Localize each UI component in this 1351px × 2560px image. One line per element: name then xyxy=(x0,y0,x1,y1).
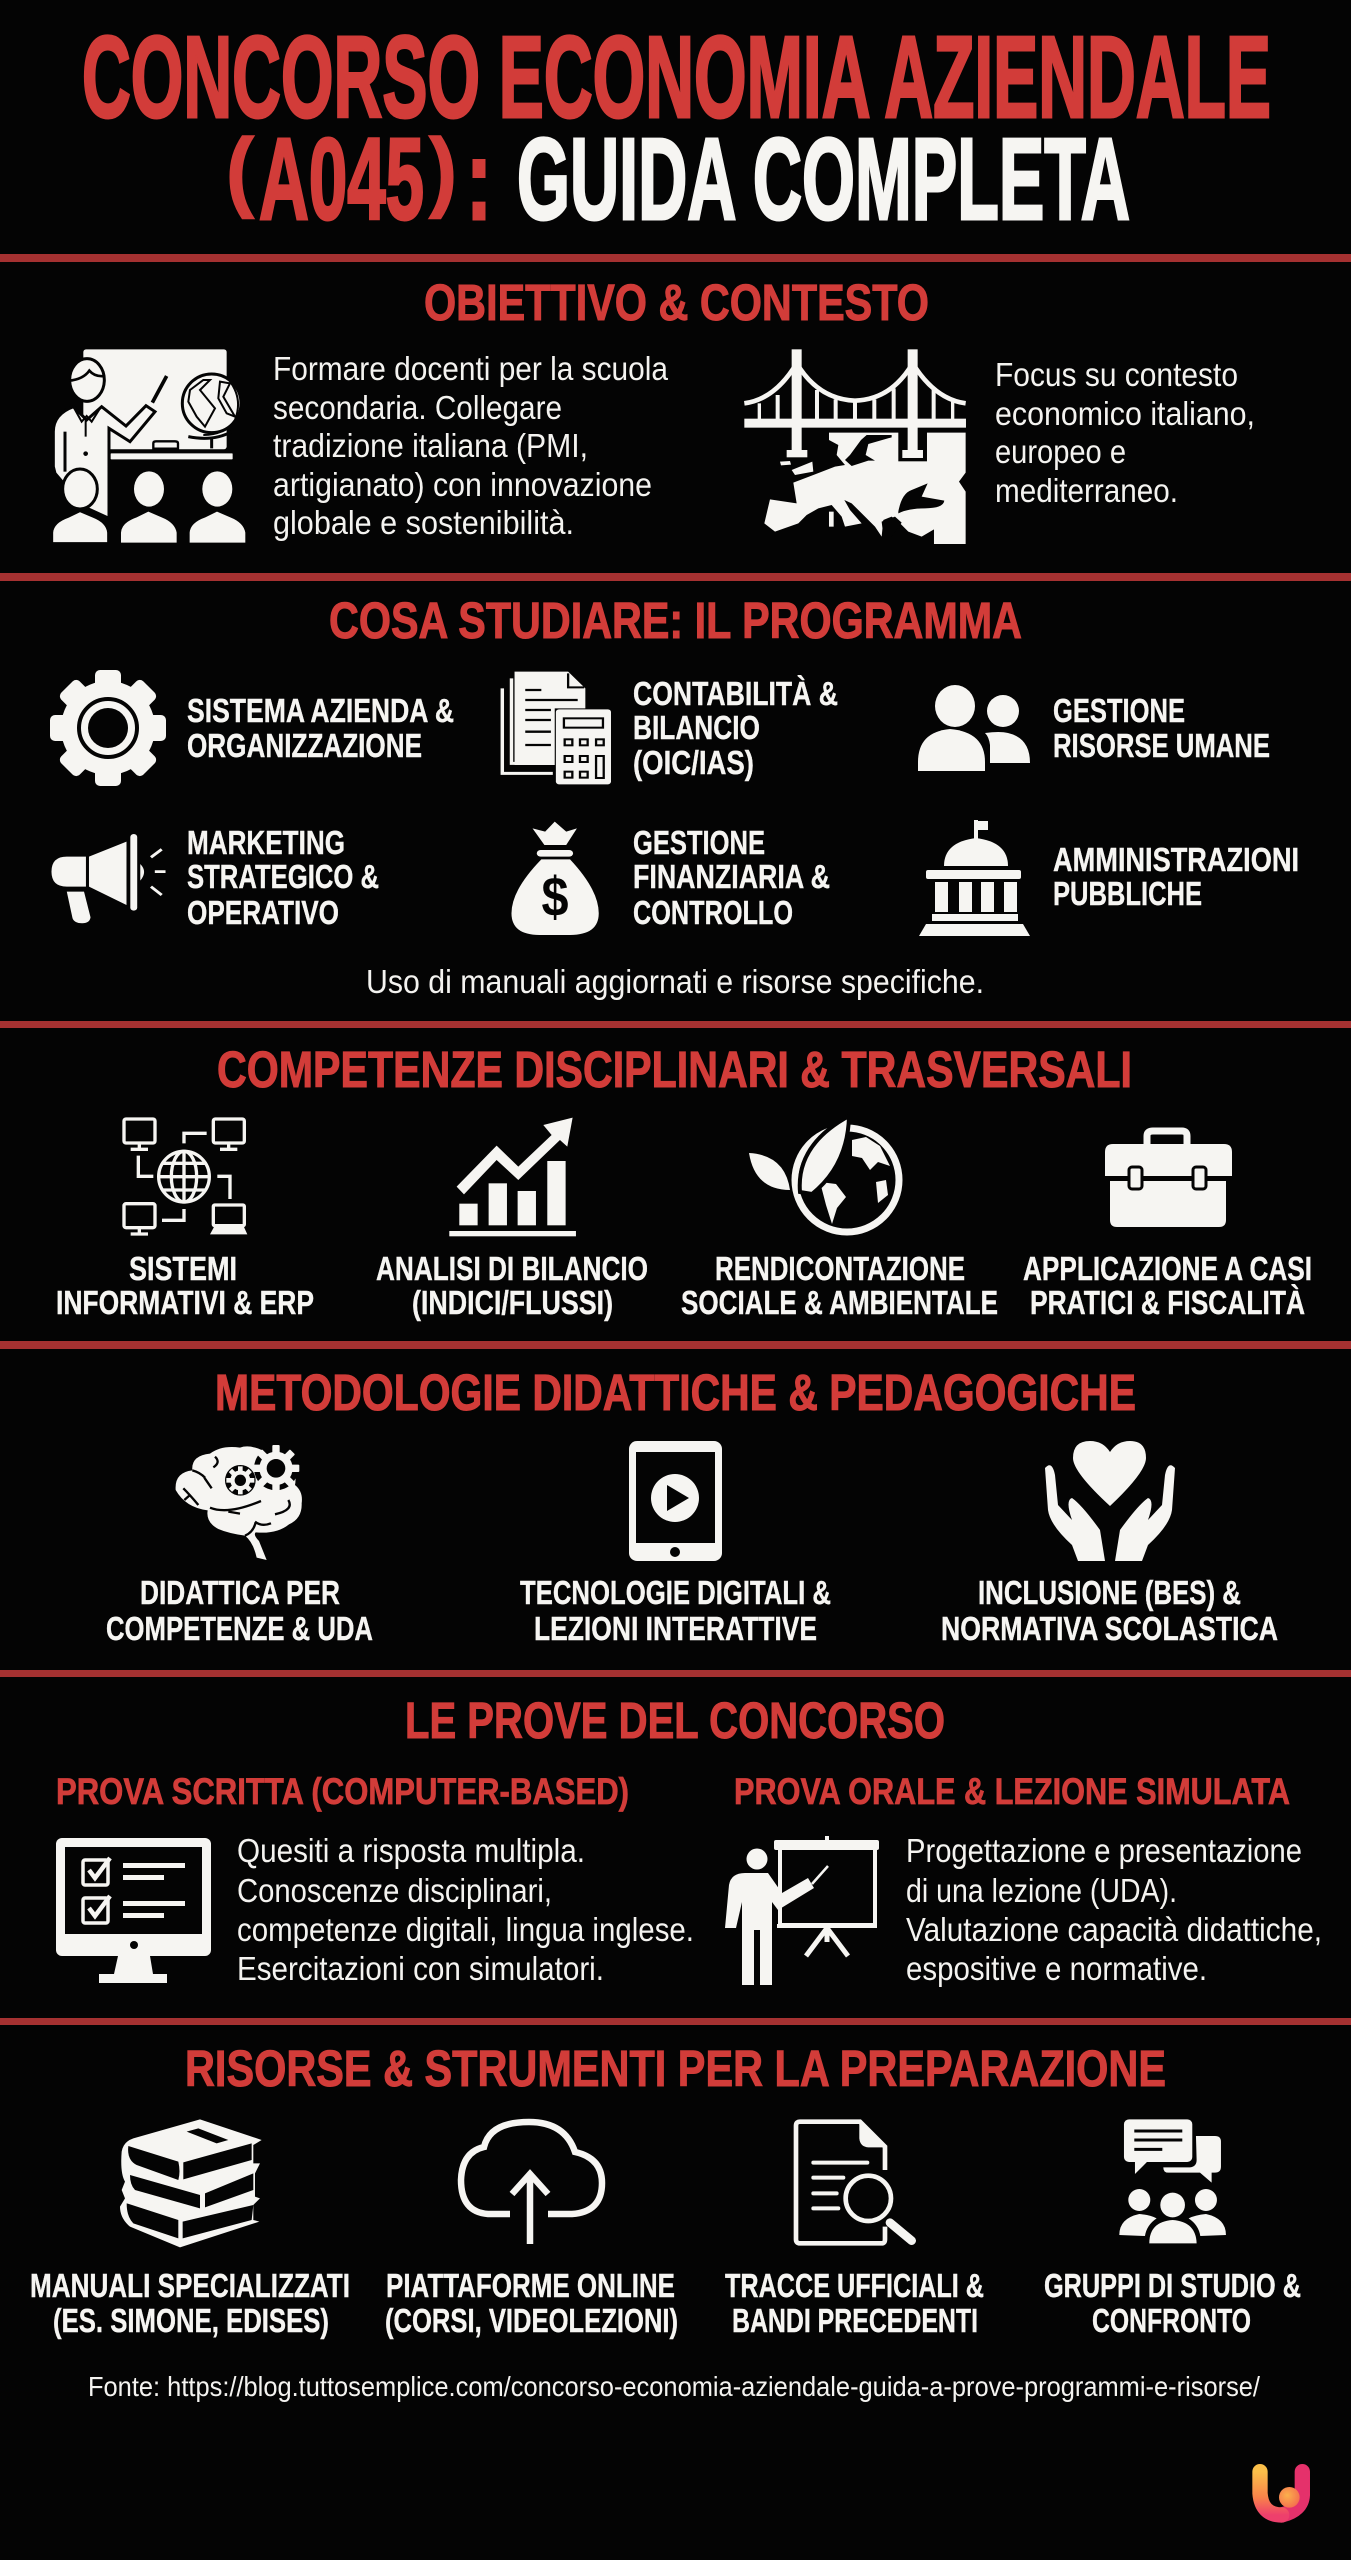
item: marketing: MARKETING xyxy=(187,825,345,862)
text: formare docenti: Formare docenti per la scuola xyxy=(273,350,669,387)
item: inclusione: INCLUSIONE (BES) & xyxy=(978,1575,1241,1612)
item: sistema azienda: SISTEMA AZIENDA & xyxy=(187,693,454,730)
icon: megaphone xyxy=(51,834,166,923)
icon: globe with leaves xyxy=(749,1116,899,1232)
item: piattaforme xyxy=(385,2122,678,2340)
item: rendicontazione xyxy=(681,1116,998,1322)
item: didattica per competenze: COMPETENZE & UDA xyxy=(106,1611,373,1648)
item: marketing xyxy=(51,825,379,932)
text: progettazione xyxy=(906,1832,1322,1987)
item: piattaforme: (CORSI, VIDEOLEZIONI) xyxy=(385,2303,678,2340)
icon: documents and calculator xyxy=(502,672,611,784)
icon: document with magnifier xyxy=(796,2122,912,2243)
item: marketing: STRATEGICO & xyxy=(187,859,379,896)
text: quesiti: Esercitazioni con simulatori. xyxy=(237,1950,604,1987)
item: sistema azienda: ORGANIZZAZIONE xyxy=(187,728,422,765)
item: contabilita xyxy=(502,672,838,784)
item: rendicontazione: SOCIALE & AMBIENTALE xyxy=(681,1285,998,1322)
icon: brain with gears xyxy=(176,1445,302,1560)
text: quesiti: Conoscenze disciplinari, xyxy=(237,1872,552,1909)
icon: briefcase xyxy=(1105,1131,1232,1227)
item: sistemi informativi: SISTEMI xyxy=(129,1251,237,1288)
item: inclusione xyxy=(941,1441,1278,1648)
item: contabilita: (OIC/IAS) xyxy=(633,745,754,782)
icon: chat bubbles and group xyxy=(1119,2119,1226,2243)
text: progettazione: di una lezione (UDA). xyxy=(906,1872,1177,1909)
item: tracce: TRACCE UFFICIALI & xyxy=(725,2268,984,2305)
item: tecnologie digitali: TECNOLOGIE DIGITALI & xyxy=(520,1575,831,1612)
panel: competenze xyxy=(56,1041,1312,1322)
icon: tablet with play button xyxy=(629,1441,722,1561)
icon: money bag xyxy=(511,822,599,935)
item: tecnologie digitali xyxy=(520,1441,831,1648)
text: focus su contesto: europeo e xyxy=(995,433,1126,470)
text: focus su contesto: Focus su contesto xyxy=(995,356,1238,393)
icon: presenter at board xyxy=(725,1836,879,1985)
item: gruppi di studio: CONFRONTO xyxy=(1092,2303,1251,2340)
icon: hands holding heart xyxy=(1045,1441,1175,1561)
item: sistema azienda xyxy=(50,670,454,786)
item: rendicontazione: RENDICONTAZIONE xyxy=(715,1251,965,1288)
note: manuali aggiornati: Uso di manuali aggiornati e risorse specifiche. xyxy=(366,963,984,1000)
text: formare docenti: secondaria. Collegare xyxy=(273,389,562,426)
text: quesiti xyxy=(237,1832,694,1987)
text: quesiti: Quesiti a risposta multipla. xyxy=(237,1832,585,1869)
logo xyxy=(1260,2472,1302,2515)
item: tecnologie digitali: LEZIONI INTERATTIVE xyxy=(534,1611,817,1648)
item: analisi di bilancio xyxy=(376,1118,648,1322)
title: ( xyxy=(226,120,255,219)
text: formare docenti: artigianato) con innovazione xyxy=(273,466,652,503)
heading: obiettivo: OBIETTIVO & CONTESTO xyxy=(424,274,929,331)
icon: stack of books xyxy=(120,2119,262,2247)
heading: le prove: LE PROVE DEL CONCORSO xyxy=(405,1692,945,1749)
icon: government building xyxy=(919,820,1030,936)
item: analisi di bilancio: (INDICI/FLUSSI) xyxy=(412,1285,613,1322)
item: risorse umane: GESTIONE xyxy=(1053,693,1185,730)
item: gestione finanziaria: CONTROLLO xyxy=(633,895,793,932)
icon: cloud upload xyxy=(461,2122,602,2244)
item: tracce: BANDI PRECEDENTI xyxy=(732,2303,978,2340)
item: amministrazioni pubbliche: PUBBLICHE xyxy=(1053,876,1202,913)
panel: le prove xyxy=(56,1692,1322,1987)
item: tracce xyxy=(725,2122,984,2340)
title: ) xyxy=(429,120,457,219)
text: progettazione: Progettazione e presentazione xyxy=(906,1832,1302,1869)
item: amministrazioni pubbliche: AMMINISTRAZIONI xyxy=(1053,842,1299,879)
item: marketing: OPERATIVO xyxy=(187,895,339,932)
title: A045 xyxy=(259,114,424,244)
icon: network of computers xyxy=(124,1119,247,1234)
item: contabilita: CONTABILITÀ & xyxy=(633,675,838,713)
panel: cosa studiare xyxy=(50,592,1299,1000)
subheading: prova scritta: PROVA SCRITTA (COMPUTER-BASED) xyxy=(56,1771,629,1812)
icon: teacher with class and globe xyxy=(53,349,245,543)
icon: money bag: $ xyxy=(542,865,568,928)
panel: metodologie xyxy=(106,1364,1278,1648)
panel: obiettivo e contesto xyxy=(53,274,1255,544)
item: contabilita: BILANCIO xyxy=(633,710,760,747)
item: amministrazioni pubbliche xyxy=(919,820,1299,936)
heading: competenze: COMPETENZE DISCIPLINARI & TRASVERSALI xyxy=(217,1041,1132,1098)
text: quesiti: competenze digitali, lingua inglese. xyxy=(237,1911,694,1948)
item: sistemi informativi: INFORMATIVI & ERP xyxy=(56,1285,314,1322)
text: focus su contesto xyxy=(995,356,1255,509)
icon: gear xyxy=(50,670,166,786)
text: focus su contesto: mediterraneo. xyxy=(995,472,1178,509)
item: risorse umane: RISORSE UMANE xyxy=(1053,728,1270,765)
text: formare docenti: tradizione italiana (PMI, xyxy=(273,427,588,464)
item: manuali: (ES. SIMONE, EDISES) xyxy=(53,2303,329,2340)
item: sistemi informativi xyxy=(56,1119,314,1322)
panel: risorse xyxy=(30,2040,1301,2340)
item: gestione finanziaria xyxy=(511,822,830,935)
source line: Fonte: https://blog.tuttosemplice.com/concorso-economia-aziendale-guida-a-prove-programmi-e-risorse/ xyxy=(88,2371,1260,2402)
text: focus su contesto: economico italiano, xyxy=(995,395,1255,432)
text: formare docenti xyxy=(273,350,669,541)
item: didattica per competenze xyxy=(106,1445,373,1648)
heading: cosa studiare: COSA STUDIARE: IL PROGRAMMA xyxy=(329,592,1022,649)
icon: two people xyxy=(918,685,1030,771)
item: piattaforme: PIATTAFORME ONLINE xyxy=(386,2268,675,2305)
title xyxy=(82,12,1271,244)
item: analisi di bilancio: ANALISI DI BILANCIO xyxy=(376,1251,648,1288)
item: gruppi di studio xyxy=(1044,2119,1301,2340)
item: manuali: MANUALI SPECIALIZZATI xyxy=(30,2268,350,2305)
item: manuali xyxy=(30,2119,350,2340)
icon: monitor with checklist xyxy=(56,1838,211,1983)
item: gestione finanziaria: FINANZIARIA & xyxy=(633,859,830,896)
item: risorse umane xyxy=(918,685,1270,771)
text: progettazione: espositive e normative. xyxy=(906,1950,1207,1987)
icon: growth chart xyxy=(449,1118,576,1236)
icon: bridge over europe map xyxy=(744,349,966,544)
item: didattica per competenze: DIDATTICA PER xyxy=(140,1575,340,1612)
title: : xyxy=(466,114,492,244)
text: formare docenti: globale e sostenibilità. xyxy=(273,504,574,541)
subpanel: prova scritta xyxy=(56,1771,694,1987)
item: casi pratici xyxy=(1023,1131,1312,1322)
item: gestione finanziaria: GESTIONE xyxy=(633,825,765,862)
heading: metodologie: METODOLOGIE DIDATTICHE & PEDAGOGICHE xyxy=(215,1364,1136,1421)
subpanel: prova orale xyxy=(725,1771,1322,1987)
